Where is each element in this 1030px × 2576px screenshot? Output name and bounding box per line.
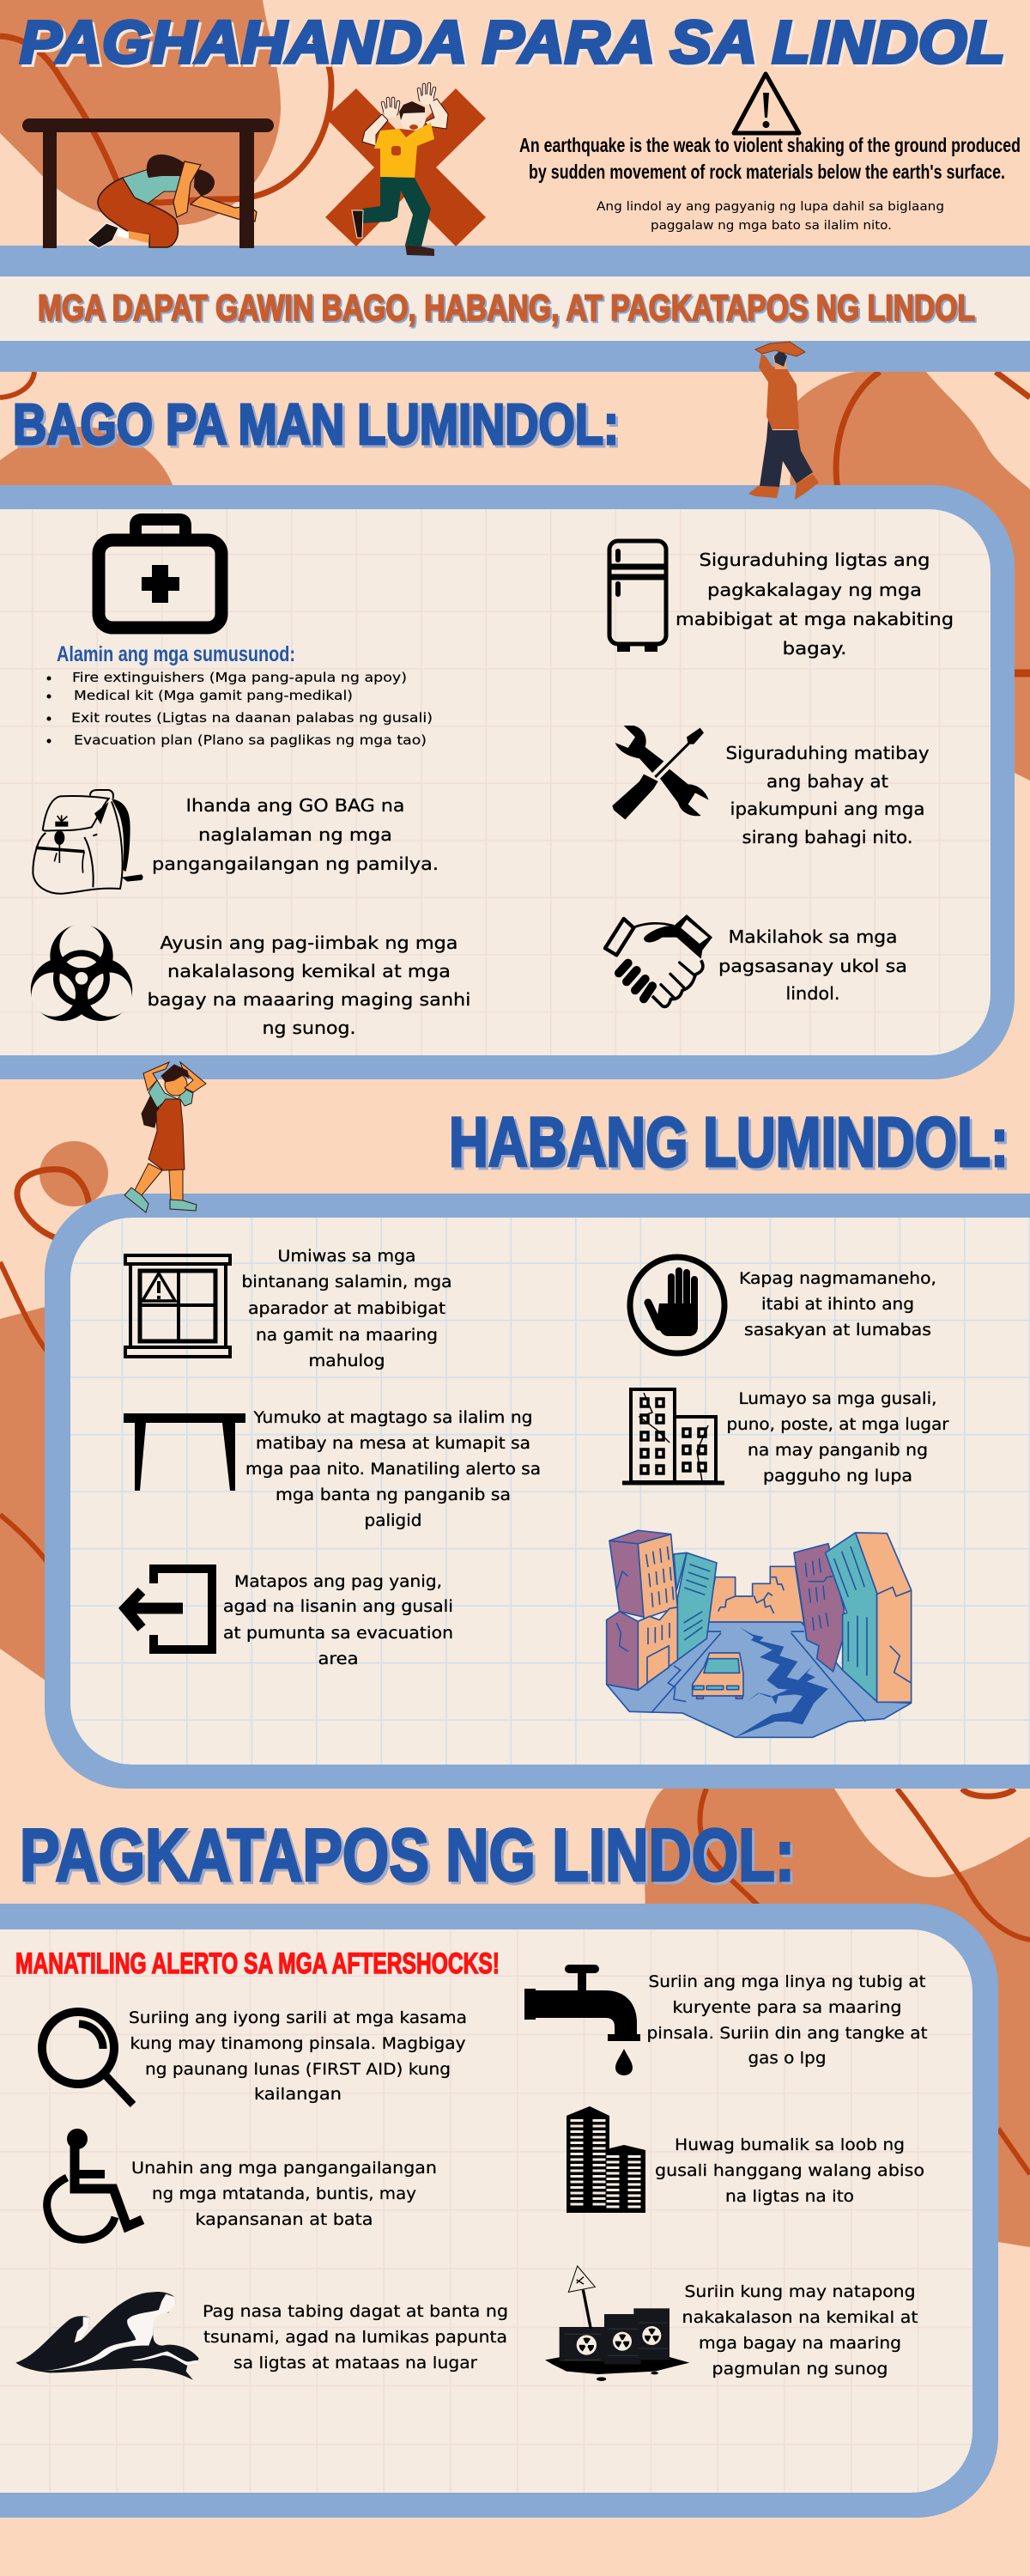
text: earthquake definition <box>519 134 1021 183</box>
text: table <box>245 1409 541 1530</box>
text: faucet: pinsala. Suriin din ang tangke at <box>647 2024 927 2043</box>
icon: magnifier <box>42 2012 133 2105</box>
title: PAGHAHANDA PARA SA LINDOL <box>20 9 1005 76</box>
text: chemicals: bagay na maaaring maging sanhi <box>148 989 470 1010</box>
text: tsunami: tsunami, agad na lumikas papunta <box>203 2328 507 2347</box>
icon: tools <box>612 726 709 819</box>
text: stay out: gusali hanggang walang abiso <box>655 2161 924 2180</box>
text: window: mahulog <box>309 1352 385 1370</box>
illustration: earthquake city <box>607 1530 912 1737</box>
text: fridge <box>676 550 954 659</box>
icon: toxic barrels <box>545 2266 689 2381</box>
icon: faucet <box>524 1965 640 2075</box>
text: vulnerable: ng mga mtatanda, buntis, may <box>152 2184 416 2203</box>
text: chemicals: ng sunog. <box>263 1018 355 1038</box>
text: buildings: puno, poste, at mga lugar <box>726 1416 949 1434</box>
text: table: matibay na mesa at kumapit sa <box>256 1435 530 1453</box>
checklist: Exit routes (Ligtas na daanan palabas ng gusali) <box>71 710 433 726</box>
text: tsunami: sa ligtas at mataas na lugar <box>233 2354 477 2372</box>
text: faucet <box>647 1972 927 2068</box>
text: first aid: ng paunang lunas (FIRST AID) kung <box>145 2060 451 2079</box>
text: driving: Kapag nagmamaneho, <box>739 1270 936 1288</box>
icon: stop hand <box>630 1257 724 1353</box>
text: drills: Makilahok sa mga <box>728 927 898 947</box>
icon: backpack <box>33 790 143 894</box>
panel: habang lumindol <box>45 1194 1030 1789</box>
text: buildings: na may panganib ng <box>748 1442 928 1460</box>
text: faucet: gas o lpg <box>748 2049 826 2068</box>
text: first aid: kailangan <box>254 2085 342 2104</box>
illustration: table with person ducking <box>22 118 274 248</box>
text: go bag: pangangailangan ng pamilya. <box>152 854 439 874</box>
icon: skyscrapers <box>566 2106 645 2213</box>
illustration: wrong pose X with person <box>325 84 486 256</box>
text: exit: at pumunta sa evacuation <box>223 1625 453 1643</box>
text: go bag: Ihanda ang GO BAG na <box>185 795 405 816</box>
text: buildings: pagguho ng lupa <box>763 1467 912 1485</box>
panel: bago pa man lumindol <box>0 485 1015 1079</box>
text: chemicals <box>148 933 470 1038</box>
text: chemicals: nakalalasong kemikal at mga <box>167 961 451 981</box>
text: exit: agad na lisanin ang gusali <box>223 1598 453 1616</box>
text: window: na gamit na maaring <box>256 1327 438 1345</box>
text: window: bintanang salamin, mga <box>242 1273 451 1291</box>
text: go bag: naglalaman ng mga <box>198 824 392 845</box>
checklist: Medical kit (Mga gamit pang-medikal) <box>74 688 353 703</box>
text: Tagalog definition: paggalaw ng mga bato sa ilalim nito. <box>651 219 892 233</box>
text: Tagalog definition: Ang lindol ay ang pagyanig ng lupa dahil sa biglaang <box>597 200 944 214</box>
text: drills: lindol. <box>786 983 839 1004</box>
text: fridge: pagkakalagay ng mga <box>707 580 922 600</box>
text: table: mga banta ng panganib sa <box>276 1486 511 1504</box>
icon: tsunami wave <box>15 2292 199 2380</box>
icon: wheelchair <box>47 2129 142 2239</box>
checklist <box>46 642 433 748</box>
text: faucet: kuryente para sa maaring <box>673 1998 901 2017</box>
text: driving: itabi at ihinto ang <box>761 1296 914 1314</box>
text: vulnerable: kapansanan at bata <box>196 2210 373 2229</box>
text: chemicals: Ayusin ang pag-iimbak ng mga <box>160 933 458 953</box>
text: window: aparador at mabibigat <box>248 1300 445 1318</box>
text: spills: pagmulan ng sunog <box>712 2360 888 2379</box>
text: stay out: na ligtas na ito <box>725 2187 854 2206</box>
text: tools <box>726 743 930 848</box>
text: go bag <box>152 795 439 874</box>
text: tools: sirang bahagi nito. <box>742 827 913 848</box>
text: spills: mga bagay na maaring <box>699 2334 901 2353</box>
callout: aftershocks: MANATILING ALERTO SA MGA AFTERSHOCKS! <box>15 1947 500 1980</box>
text: driving <box>739 1270 936 1340</box>
checklist: Alamin ang mga sumusunod: <box>57 642 295 666</box>
icon: warning triangle <box>734 74 799 133</box>
icon: cracked buildings <box>622 1389 724 1483</box>
text: tools: Siguraduhing matibay <box>726 743 930 763</box>
icon: fridge <box>609 541 666 652</box>
text: tsunami: Pag nasa tabing dagat at banta ng <box>203 2302 508 2321</box>
text: driving: sasakyan at lumabas <box>744 1321 931 1340</box>
text: stay out: Huwag bumalik sa loob ng <box>675 2136 905 2154</box>
icon: biohazard <box>19 924 144 1032</box>
text: table: paligid <box>364 1512 422 1530</box>
text: buildings <box>726 1390 949 1485</box>
text: tools: ipakumpuni ang mga <box>730 799 925 819</box>
text: exit: Matapos ang pag yanig, <box>234 1573 442 1591</box>
checklist: Evacuation plan (Plano sa paglikas ng mga tao) <box>74 732 427 748</box>
text: tsunami <box>203 2302 508 2372</box>
icon: handshake <box>605 914 712 1006</box>
text: window: Umiwas sa mga <box>278 1248 415 1266</box>
text: exit <box>223 1573 453 1668</box>
text: spills <box>682 2282 918 2379</box>
text: faucet: Suriin ang mga linya ng tubig at <box>649 1972 925 1991</box>
text: drills <box>718 927 907 1004</box>
illustration: standing man covering head <box>748 342 819 500</box>
text: fridge: Siguraduhing ligtas ang <box>699 550 930 570</box>
blue band with subtitle strip <box>0 246 1030 372</box>
text: vulnerable <box>131 2159 437 2229</box>
icon: exit <box>125 1569 212 1649</box>
text: tools: ang bahay at <box>766 771 888 792</box>
text: stay out <box>655 2136 924 2206</box>
heading: pagkatapos: PAGKATAPOS NG LINDOL: <box>20 1814 795 1897</box>
icon: table <box>124 1413 245 1491</box>
text: spills: nakakalason na kemikal at <box>682 2308 918 2327</box>
text: drills: pagsasanay ukol sa <box>718 956 907 976</box>
text: table: mga paa nito. Manatiling alerto sa <box>245 1461 541 1479</box>
text: table: Yumuko at magtago sa ilalim ng <box>252 1409 532 1427</box>
text: Tagalog definition <box>597 200 944 233</box>
icon: window with warning <box>125 1255 230 1357</box>
text: first aid: kung may tinamong pinsala. Magbigay <box>130 2034 465 2053</box>
illustration: girl covering head <box>124 1062 206 1212</box>
icon: first aid kit <box>99 519 221 628</box>
text: first aid <box>129 2008 467 2104</box>
text: exit: area <box>318 1650 359 1668</box>
text: buildings: Lumayo sa mga gusali, <box>738 1390 937 1408</box>
text: fridge: bagay. <box>783 638 846 659</box>
text: spills: Suriin kung may natapong <box>685 2282 915 2301</box>
panel: pagkatapos ng lindol <box>0 1904 998 2518</box>
text: vulnerable: Unahin ang mga pangangailangan <box>131 2159 437 2178</box>
checklist: Fire extinguishers (Mga pang-apula ng apoy) <box>72 670 407 685</box>
text: fridge: mabibigat at mga nakabiting <box>676 609 954 629</box>
heading: bago: BAGO PA MAN LUMINDOL: <box>13 392 619 457</box>
text: first aid: Suriing ang iyong sarili at mga kasama <box>129 2008 467 2027</box>
text: window <box>242 1248 451 1370</box>
